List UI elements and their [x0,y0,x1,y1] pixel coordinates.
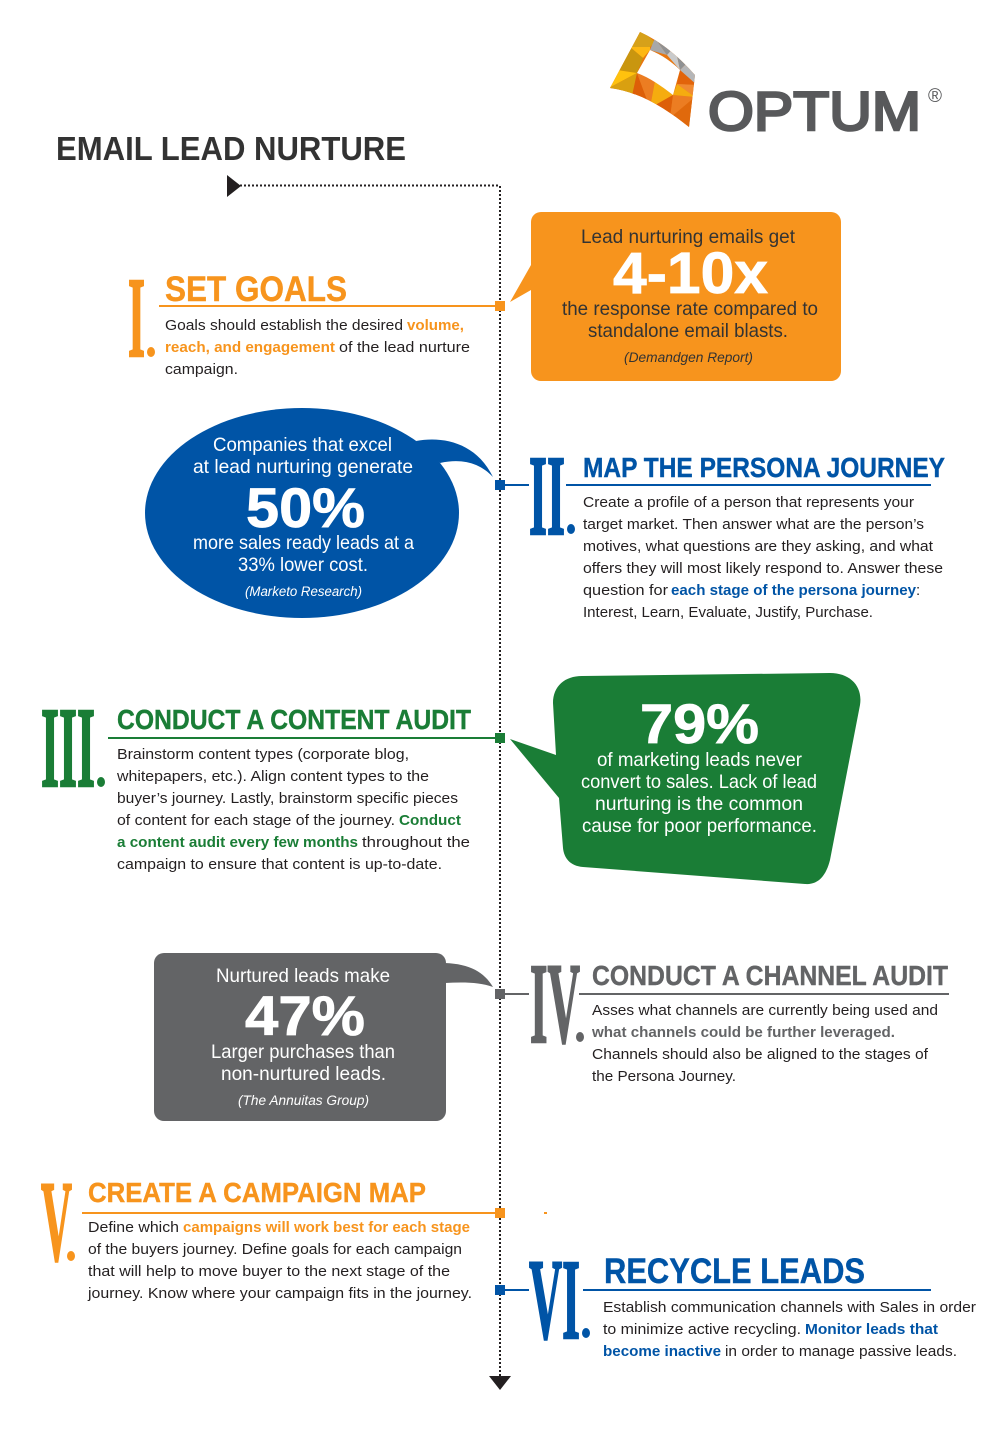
callout: 47%: 47% [245,984,365,1047]
section II: map the persona journey [495,432,945,621]
section IV: conduct a channel audit [495,940,949,1085]
body text [116,746,470,873]
body text [583,494,943,621]
callout: 50%: 33% lower cost. [238,554,368,576]
body text: what channels could be further leveraged. [591,1024,895,1041]
body text: Interest, Learn, Evaluate, Justify, Purchase. [583,604,873,621]
body text: Monitor leads that [805,1321,938,1338]
body text: campaigns will work best for each stage [183,1219,470,1236]
connector and node [495,989,949,999]
callout: 79%: cause for poor performance. [582,815,817,837]
body text: question for [583,582,668,599]
body text [603,1299,976,1360]
body text [87,1219,472,1302]
callout: 50% [145,408,493,618]
section IV: conduct a channel audit: IV [530,940,580,1067]
heading: create a campaign map: CREATE A CAMPAIGN MAP [88,1177,426,1208]
body text: buyer’s journey. Lastly, brainstorm specific pieces [117,790,458,807]
numeral II [529,432,575,559]
body text: become inactive [603,1343,721,1360]
numeral I: I [128,254,145,381]
callout: 50%: (Marketo Research) [245,584,362,599]
body text: the Persona Journey. [592,1068,736,1085]
callout: 79%: 79% [640,692,759,755]
body text: volume, [407,317,464,334]
body text: campaign. [165,361,238,378]
connector and node [82,1208,547,1218]
section I: set goals [128,254,505,381]
title: EMAIL LEAD NURTURE [56,130,406,167]
body text [591,1002,938,1085]
callout: 50%: Companies that excel [213,434,392,456]
callout: 4-10x: (Demandgen Report) [624,350,753,365]
logo registered mark: ® [928,86,942,107]
callout: 4-10x [510,212,841,381]
body text: throughout the [362,834,470,851]
heading: conduct a channel audit: CONDUCT A CHANNEL AUDIT [592,960,948,991]
body text: target market. Then answer what are the person’s [583,516,924,533]
callout: 47%: Larger purchases than [211,1041,395,1063]
numeral IV [530,940,584,1067]
section VI: recycle leads: VI [529,1236,580,1363]
body text: to minimize active recycling. [603,1321,801,1338]
callout: 4-10x: 4-10x [613,241,768,306]
body text: that will help to move buyer to the next stage of the [88,1263,450,1280]
body text: Conduct [399,812,461,829]
body text: of the lead nurture [339,339,470,356]
callout: 50%: at lead nurturing generate [193,456,413,478]
connector and node [108,733,505,743]
heading: map the persona journey: MAP THE PERSONA JOURNEY [583,452,945,483]
timeline: dotted path with start and end arrows [227,175,511,1390]
body text: each stage of the persona journey [671,582,917,599]
body text: Brainstorm content types (corporate blog, [117,746,409,763]
section III: conduct a content audit: III [41,684,95,811]
connector and node [495,1285,931,1295]
connector and node [159,301,505,311]
numeral I [128,254,155,381]
body text: of the buyers journey. Define goals for each campaign [88,1241,462,1258]
section V: create a campaign map: V [41,1158,72,1285]
heading: conduct a content audit: CONDUCT A CONTENT AUDIT [117,704,471,735]
numeral III [41,684,105,811]
body text: Asses what channels are currently being used and [592,1002,938,1019]
callout: 79%: of marketing leads never [597,749,802,771]
body text: in order to manage passive leads. [725,1343,957,1360]
callout: 47%: non-nurtured leads. [221,1063,386,1085]
callout: 4-10x: standalone email blasts. [588,320,788,342]
connector and node [495,480,931,490]
logo wordmark: OPTUM [708,80,921,142]
heading: set goals: SET GOALS [165,270,347,309]
callout: 50%: 50% [246,476,365,539]
body text: campaign to ensure that content is up-to-date. [117,856,442,873]
callout: 47%: Nurtured leads make [216,965,390,987]
callout: 79% [510,673,860,884]
callout: 79%: convert to sales. Lack of lead [581,771,817,793]
body text: Define which [88,1219,179,1236]
numeral V [41,1158,75,1285]
body text: whitepapers, etc.). Align content types to the [116,768,429,785]
section III: conduct a content audit [41,684,505,873]
callout: 79%: nurturing is the common [595,793,803,815]
logo: Optum [610,32,918,132]
body text: Goals should establish the desired [165,317,403,334]
body text: of content for each stage of the journey. [117,812,395,829]
body text: Channels should also be aligned to the stages of [592,1046,929,1063]
callout: 50%: more sales ready leads at a [193,532,414,554]
body text: journey. Know where your campaign fits in the journey. [87,1285,472,1302]
body text: Create a profile of a person that represents your [583,494,914,511]
body text [165,317,470,378]
section V: create a campaign map [41,1158,547,1302]
callout: 4-10x: the response rate compared to [562,298,818,320]
body text: offers they will most likely respond to. Answer these [583,560,943,577]
body text: : [916,582,920,599]
body text: reach, and engagement [165,339,335,356]
heading: recycle leads: RECYCLE LEADS [604,1252,865,1291]
callout: 4-10x: Lead nurturing emails get [581,226,796,248]
numeral II: II [529,432,565,559]
section VI: recycle leads [495,1236,976,1363]
callout: 47% [154,953,493,1121]
body text: a content audit every few months [117,834,358,851]
body text: Establish communication channels with Sales in order [603,1299,976,1316]
callout: 47%: (The Annuitas Group) [238,1093,369,1108]
numeral VI [529,1236,590,1363]
body text: motives, what questions are they asking, and what [583,538,934,555]
